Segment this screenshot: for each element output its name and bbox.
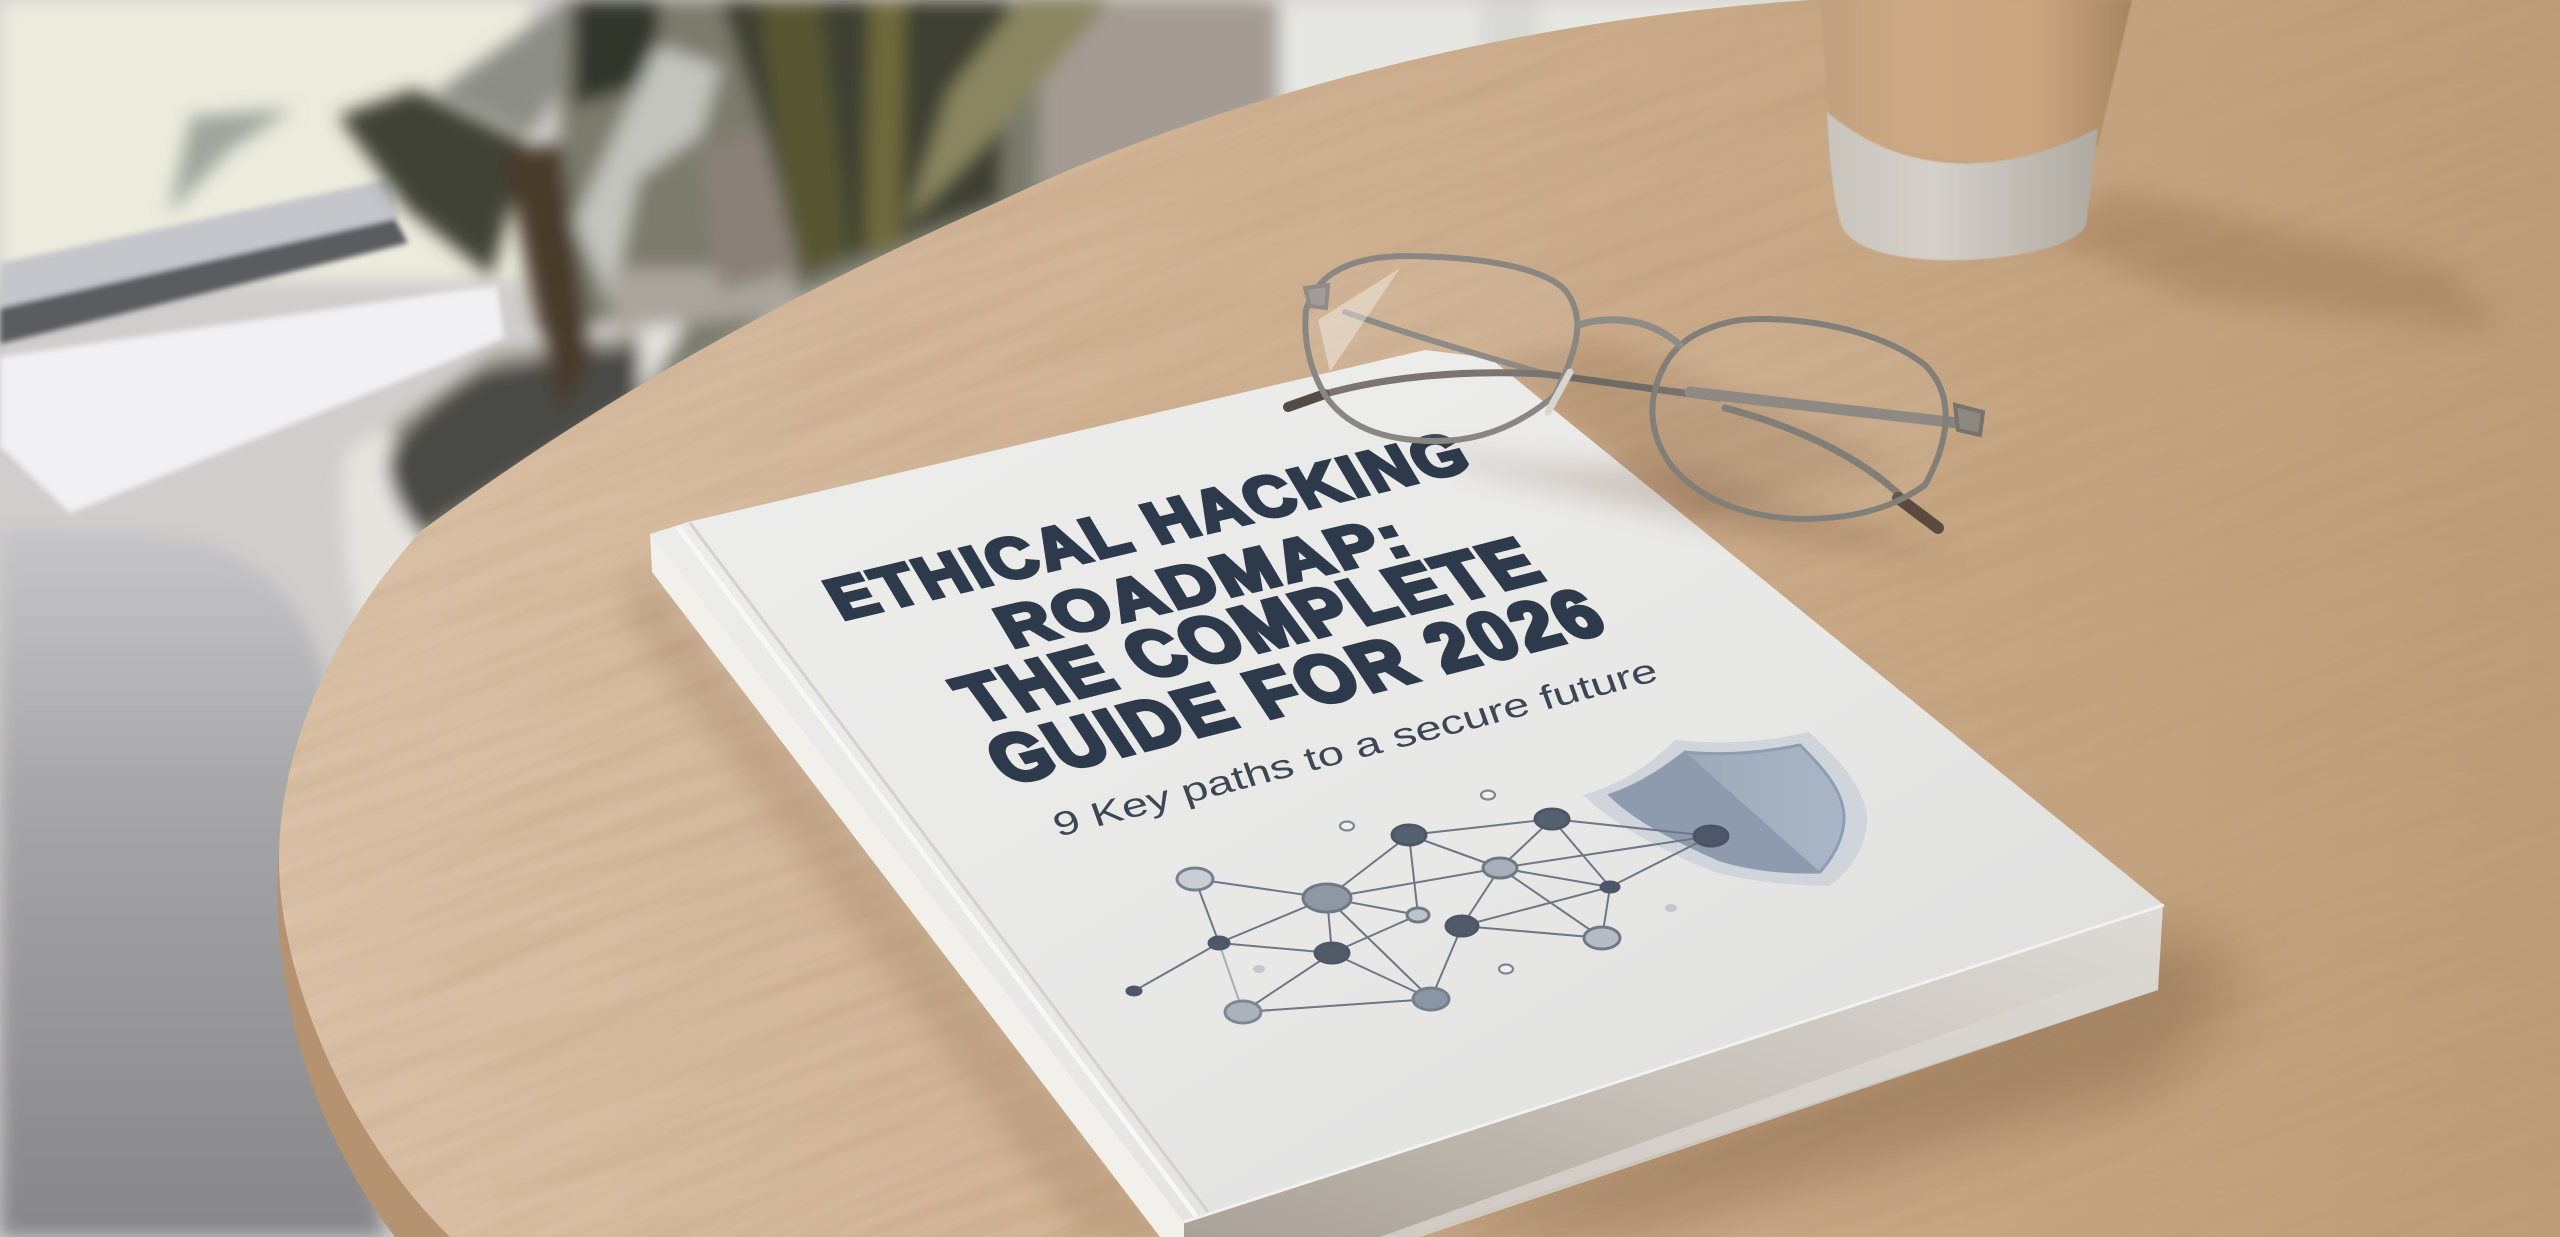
hinge <box>1305 285 1328 308</box>
background room <box>0 0 1809 1237</box>
network links <box>1134 819 1711 1012</box>
page block <box>1180 905 2163 1237</box>
left temple arm <box>1345 312 1545 374</box>
book title: THE COMPLETE <box>939 524 1560 736</box>
glasses shadow <box>1420 440 1960 560</box>
cup upper <box>1820 0 2132 162</box>
page edge lip <box>1380 960 2158 1237</box>
cover hinge groove <box>690 523 1208 1212</box>
book title: ROADMAP: <box>984 504 1424 660</box>
bridge <box>1578 320 1680 345</box>
book title <box>813 419 1622 799</box>
plant <box>169 0 1110 620</box>
left lens <box>1305 256 1577 441</box>
window sill and frame <box>0 179 504 513</box>
book title: ETHICAL HACKING <box>813 419 1484 632</box>
left lens reflection <box>1318 268 1400 372</box>
plant pot <box>343 300 700 620</box>
network nodes <box>1127 809 1728 1023</box>
nose pad <box>1548 372 1570 412</box>
plant leaves <box>169 109 293 214</box>
plant backdrop <box>560 0 1040 430</box>
decorative dots <box>1253 790 1677 974</box>
table side <box>278 850 480 1237</box>
curtain <box>1020 0 1278 210</box>
cover front edge <box>1184 905 2164 1222</box>
network diagram <box>1127 790 1728 1023</box>
cup shadow <box>2030 190 2500 330</box>
subtitle: 9 Key paths to a secure future <box>1048 651 1663 844</box>
chair <box>0 527 385 1237</box>
book title: GUIDE FOR 2026 <box>971 574 1622 799</box>
right temple arm <box>1690 392 1975 425</box>
book <box>650 350 2164 1237</box>
spine side <box>650 534 1184 1237</box>
eyeglasses <box>1288 256 1983 528</box>
window <box>0 0 1860 280</box>
icon: shield <box>1583 732 1867 886</box>
cover <box>650 350 2164 1222</box>
cup sleeve <box>1827 112 2098 260</box>
book shadow <box>1380 930 2250 1237</box>
right lens <box>1652 319 1946 519</box>
coffee cup <box>1820 0 2132 260</box>
